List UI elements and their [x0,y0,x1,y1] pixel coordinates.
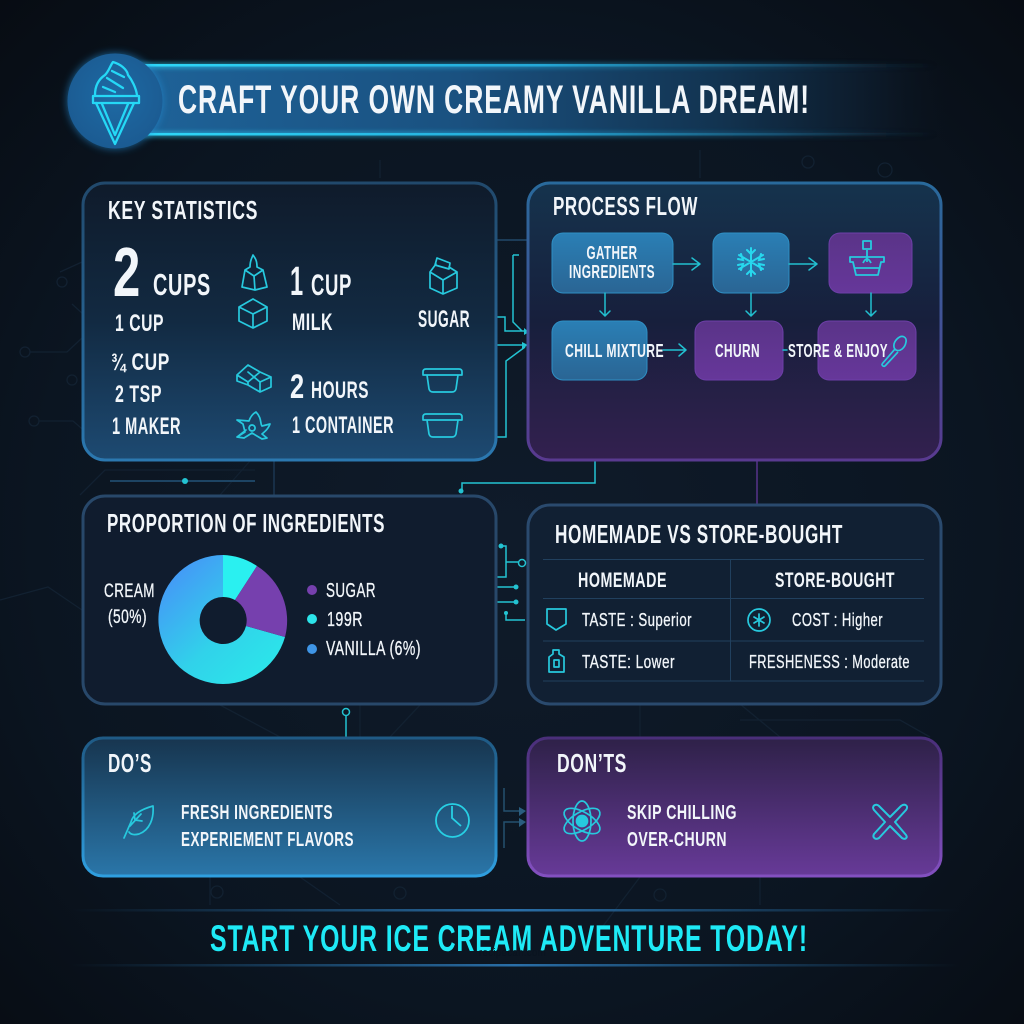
legend: 199R: 199R [327,609,363,631]
icon: mixer bowl [850,241,884,275]
legend: sugar [307,580,376,602]
icon: spoon [882,336,906,366]
step: chill mixture [552,321,664,380]
step: freeze [713,233,789,293]
arrow: chill to churn [663,344,686,356]
arrow: freeze to churn [746,293,756,316]
legend: vanilla [307,638,421,660]
icon: container lid [423,414,462,437]
heading: KEY STATISTICS [108,195,258,225]
icon: ice cubes [237,365,271,392]
icon: ice cream cone [93,62,139,144]
panel background [528,505,941,704]
step: gather ingredients [552,233,673,293]
step: chill mixture: CHILL MIXTURE [565,341,664,361]
label: cream: (50%) [108,607,147,628]
panel background [83,738,496,876]
icon: container [423,369,462,392]
list: do items: EXPERIEMENT FLAVORS [181,829,354,851]
panel: proportion of ingredients [83,496,496,704]
banner circle glow [67,53,163,149]
stat: milk: MILK [292,309,333,336]
arrow: mix to store [866,293,876,316]
panel: key statistics [83,183,496,460]
row: freshness moderate: FRESHENESS : Moderate [749,652,910,672]
stat: 2 cups: CUPS [153,267,211,302]
icon: atom [560,801,604,841]
segment: purple [235,566,287,637]
arrow: gather to chill [600,293,610,316]
icon: snowflake [738,248,764,276]
list: do items: FRESH INGREDIENTS [181,802,333,824]
column head: store-bought: STORE-BOUGHT [775,569,895,592]
panel background [528,183,941,460]
list: do items [181,802,354,851]
label: cream [104,581,155,628]
step: mix [829,233,912,293]
list: don't items: SKIP CHILLING [627,802,737,824]
icon: bottle [549,650,564,672]
icon: vanilla flower [237,412,270,439]
step: churn: CHURN [715,341,760,361]
segment: top cyan [223,555,257,600]
legend: sugar: SUGAR [326,580,376,602]
stat: 2 cups [113,233,211,311]
heading: DO’S [108,748,152,778]
segment: main [158,555,285,684]
icon: milk carton [430,258,457,294]
icon: cube [239,299,267,328]
row: taste superior: TASTE : Superior [582,610,692,630]
step: gather ingredients: GATHER [586,243,638,263]
panel: process flow [528,183,941,460]
icon: asterisk circle [748,609,770,631]
icon: shield [547,609,566,630]
icon: leaf [124,806,153,838]
icon: bottle [242,255,267,290]
panel background [528,738,941,876]
stat: 2 hours [290,368,369,406]
heading: PROCESS FLOW [553,191,698,221]
panel background [83,183,496,460]
circuit connectors [110,240,757,848]
icon: crossed utensils [873,805,907,839]
watermark: recipecan.com [479,947,546,959]
step: store and enjoy [788,321,916,380]
panel: don'ts [528,738,941,876]
label: cream: CREAM [104,581,155,602]
stat: three quarter cup: ¾ CUP [111,349,170,376]
arrow: churn to store [783,349,787,351]
stat: 2 hours: HOURS [311,377,369,404]
legend: 199R [307,609,363,631]
footer rule bottom [70,964,960,966]
stat: 2 tsp: 2 TSP [115,381,162,408]
stat: 1 cup large [290,258,352,304]
list: don't items: OVER-CHURN [627,829,727,851]
stat: 1 cup large: 1 [290,258,304,304]
column head: homemade: HOMEMADE [578,569,667,592]
stat: sugar: SUGAR [418,306,470,333]
banner bar [130,63,950,137]
comparison table grid [543,559,924,681]
stat: 1 container: 1 CONTAINER [292,412,394,439]
step: gather ingredients: INGREDIENTS [569,262,655,282]
icon: clock [436,804,469,837]
legend: vanilla: VANILLA (6%) [326,638,421,660]
stat: 1 cup large: CUP [311,269,352,302]
arrow: freeze to mix [789,258,817,270]
list: don't items [627,802,737,851]
heading: HOMEMADE VS STORE-BOUGHT [555,519,843,549]
row: cost higher: COST : Higher [792,610,883,630]
panel: homemade vs store-bought [528,505,941,704]
heading: PROPORTION OF INGREDIENTS [107,508,385,538]
step: churn [695,321,783,380]
row: taste lower: TASTE: Lower [582,652,675,672]
arrow: gather to freeze [673,258,700,270]
stat: 2 cups: 2 [113,233,142,311]
background circuit pattern [0,86,930,930]
title banner [67,53,950,149]
donut chart [158,555,287,684]
step: store and enjoy: STORE & ENJOY [788,341,888,361]
stat: 1 cup: 1 CUP [115,310,164,337]
footer rule top [70,909,960,912]
panel background [83,496,496,704]
heading: DON’TS [557,748,627,778]
stat: 2 hours: 2 [290,368,305,406]
stat: 1 maker: 1 MAKER [112,413,181,440]
panel: do's [83,738,496,876]
banner circle [68,54,162,148]
